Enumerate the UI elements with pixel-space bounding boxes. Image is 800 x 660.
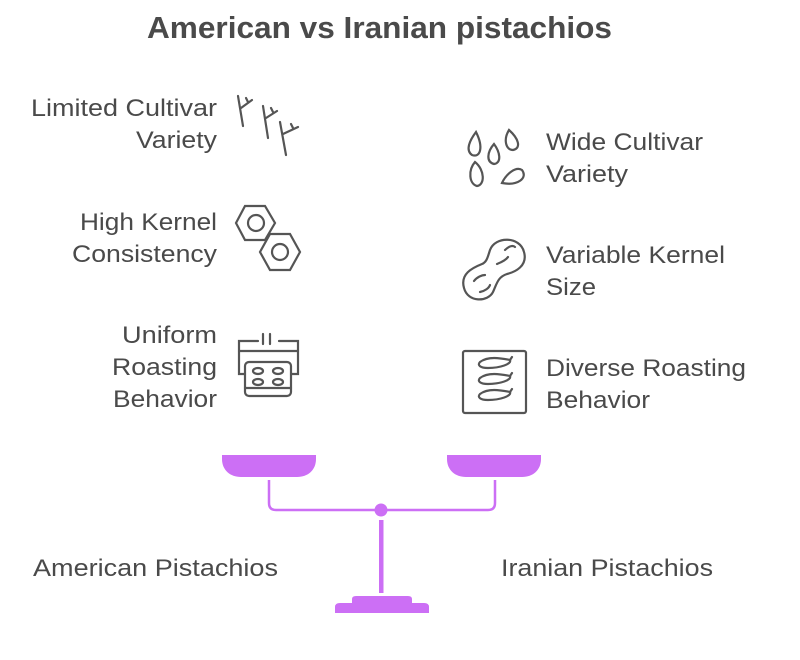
icon: peppers box: [463, 351, 526, 413]
text: variable kernel size: [546, 242, 725, 301]
icon: peanut: [463, 240, 525, 299]
balance scale: [222, 455, 541, 613]
icon: hexagon nuts: [236, 206, 300, 270]
text: limited cultivar variety: [31, 95, 217, 154]
text: variable kernel size: Variable Kernel: [546, 242, 725, 269]
text: uniform roasting behavior: [112, 322, 217, 413]
title: American vs Iranian pistachios: [147, 10, 612, 45]
left pan: [222, 455, 316, 477]
text: diverse roasting behavior: Diverse Roasting: [546, 355, 746, 382]
right pan: [447, 455, 541, 477]
text: limited cultivar variety: Limited Cultivar: [31, 95, 217, 122]
text: wide cultivar variety: [546, 129, 703, 188]
text: high kernel consistency: Consistency: [72, 241, 217, 268]
label: american pistachios: American Pistachios: [33, 555, 278, 582]
text: diverse roasting behavior: Behavior: [546, 387, 650, 414]
text: uniform roasting behavior: Uniform: [122, 322, 217, 349]
text: wide cultivar variety: Variety: [546, 161, 628, 188]
text: high kernel consistency: [72, 209, 217, 268]
text: diverse roasting behavior: [546, 355, 746, 414]
text: high kernel consistency: High Kernel: [80, 209, 217, 236]
text: variable kernel size: Size: [546, 274, 596, 301]
text: uniform roasting behavior: Behavior: [113, 386, 217, 413]
text: uniform roasting behavior: Roasting: [112, 354, 217, 381]
icon: seeds: [469, 130, 524, 186]
icon: wheat spikes: [238, 96, 298, 155]
icon: oven tray: [239, 334, 298, 396]
label: iranian pistachios: Iranian Pistachios: [501, 555, 713, 582]
text: wide cultivar variety: Wide Cultivar: [546, 129, 703, 156]
text: limited cultivar variety: Variety: [136, 127, 217, 154]
